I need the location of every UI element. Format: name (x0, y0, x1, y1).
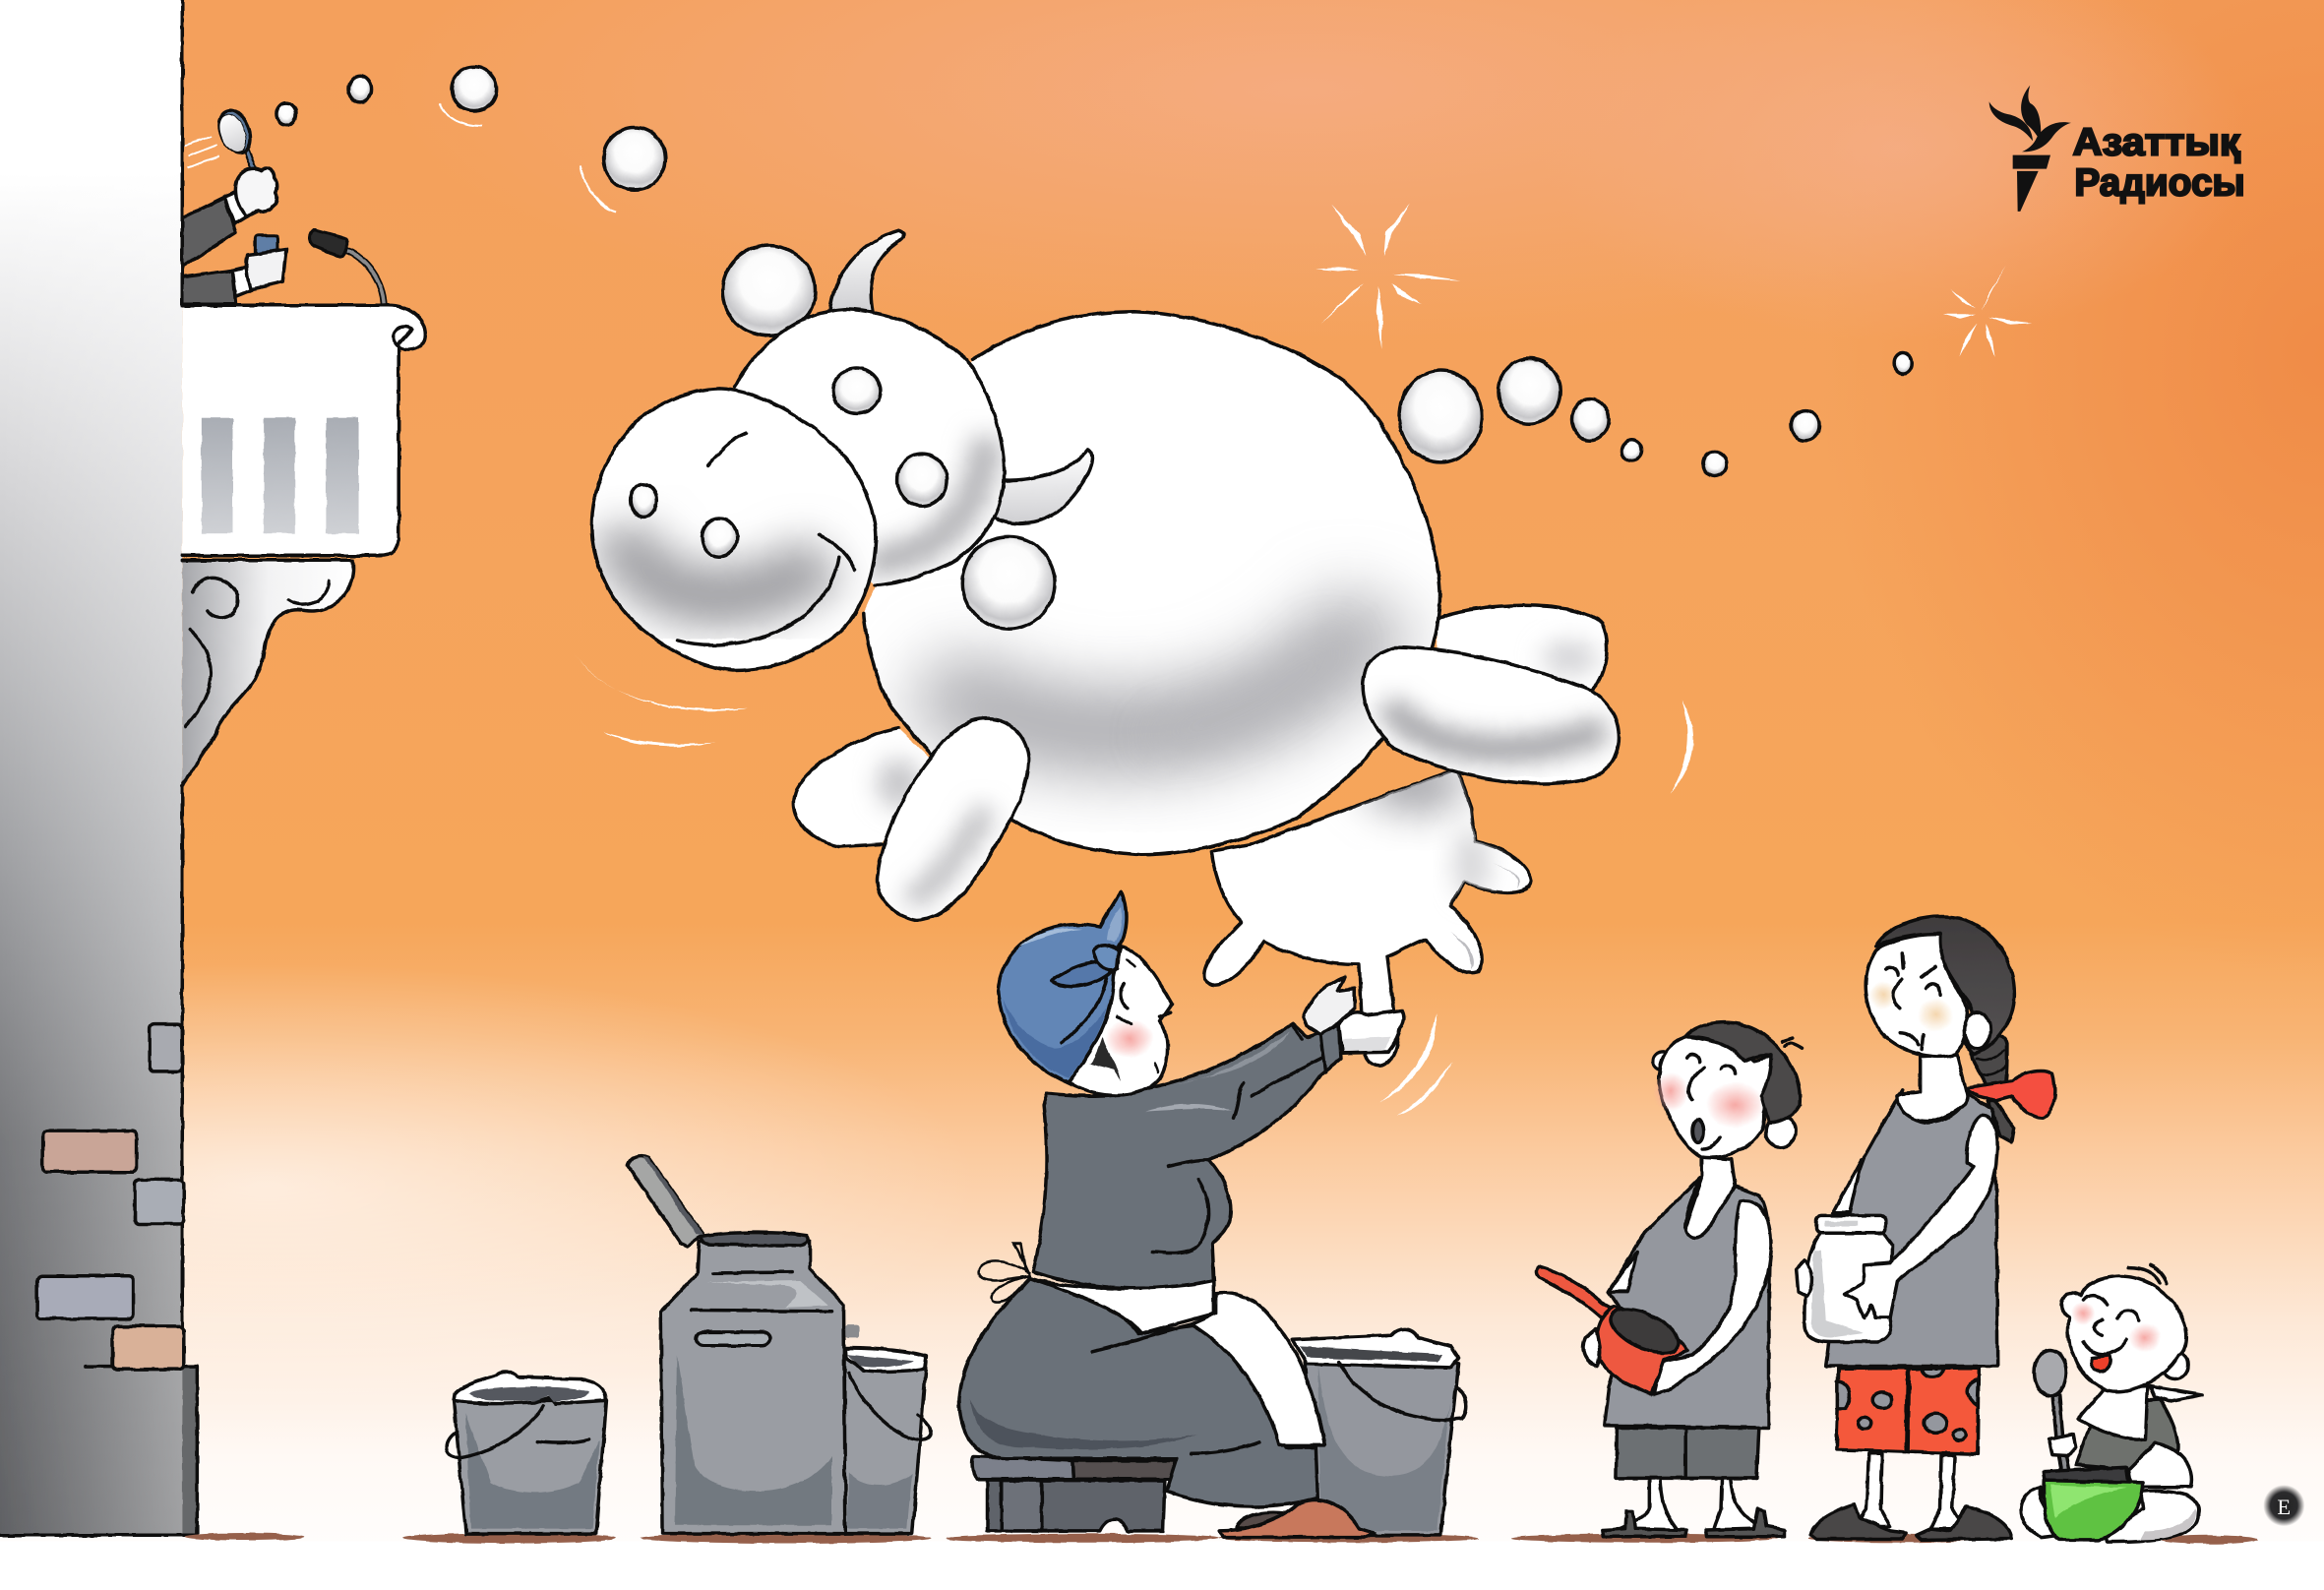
logo text: Азаттық (2073, 120, 2240, 163)
bib (2079, 1386, 2148, 1439)
motion marks (574, 653, 748, 747)
lower ear (962, 536, 1055, 629)
microphone (346, 251, 384, 304)
logo text (2073, 120, 2245, 204)
right horn (989, 450, 1092, 523)
floor shadows (185, 1533, 2257, 1544)
logo: Azattyq Radiosy (1989, 86, 2245, 212)
hands with spoon and bottle, microphone (182, 105, 384, 304)
signature mark: Е (2277, 1495, 2291, 1519)
bucket behind can (844, 1348, 931, 1534)
lower glove (246, 249, 286, 289)
spoon (245, 146, 254, 169)
bottle (255, 235, 277, 258)
sandals (1603, 1511, 1686, 1537)
balcony bracket (182, 560, 353, 785)
right hand gripping teat (1339, 1010, 1404, 1053)
arm and hand (1845, 1116, 1997, 1317)
apron bow (979, 1244, 1029, 1302)
neck (1897, 1055, 1968, 1122)
head (735, 309, 1005, 585)
crossed legs (2021, 1487, 2059, 1538)
bowl (2044, 1467, 2143, 1540)
head (1865, 916, 2014, 1057)
torso and arms (1033, 1023, 1340, 1288)
udder (1204, 754, 1531, 1066)
top ear (722, 245, 816, 336)
milk can (628, 1156, 860, 1534)
tail trail of drops (1399, 352, 1912, 475)
girl with jar (1797, 916, 2054, 1540)
shorts (1616, 1428, 1759, 1478)
shoes (1810, 1504, 1906, 1539)
torch icon (1989, 86, 2071, 212)
motion marks (185, 137, 217, 167)
shirt (2076, 1399, 2177, 1469)
milk can and buckets (447, 1156, 931, 1534)
bucket left (447, 1373, 606, 1534)
vest (1604, 1179, 1769, 1428)
cloth pile and shoe (1219, 1499, 1374, 1538)
left hand on teat (1304, 977, 1355, 1034)
top horn (830, 230, 904, 312)
legs and skirt (959, 1278, 1317, 1506)
balcony (182, 305, 425, 785)
head (1653, 1022, 1802, 1158)
lower sleeve (182, 271, 236, 304)
rear far leg (1437, 605, 1607, 691)
wall with bricks (0, 0, 197, 1535)
legs (1855, 1454, 1890, 1526)
large sparkle (1315, 205, 1461, 349)
milk splash (1379, 1013, 1452, 1116)
muzzle (591, 389, 876, 671)
shorts (1836, 1369, 1979, 1454)
upper sleeve (182, 197, 236, 267)
near front leg (878, 719, 1029, 920)
vest (1826, 1089, 1997, 1367)
face (1069, 947, 1172, 1095)
near rear leg (1363, 647, 1619, 783)
boy with red pot (1536, 1022, 1802, 1537)
jar (1797, 1215, 1893, 1342)
small sparkle (1943, 266, 2032, 357)
motion mark right of cow (1671, 700, 1693, 794)
signature mark (2263, 1485, 2304, 1526)
apron skirt (1192, 1293, 1324, 1445)
milkmaid (959, 891, 1466, 1535)
body (864, 312, 1440, 855)
legs (1616, 1478, 1678, 1531)
headscarf (998, 891, 1127, 1083)
head (2061, 1265, 2188, 1391)
braid and bow (1964, 1035, 2054, 1142)
apron waistband (1029, 1278, 1214, 1333)
arm (2129, 1443, 2191, 1487)
baby with spoon and green bowl (2021, 1265, 2203, 1542)
cuff line (1251, 1059, 1321, 1096)
arm (1654, 1200, 1771, 1395)
front far leg (794, 728, 931, 846)
bucket under apron (1293, 1329, 1466, 1535)
spoon (2034, 1350, 2076, 1474)
neck (1685, 1157, 1736, 1238)
top trail of milk drops (276, 67, 665, 212)
logo text: Радиосы (2074, 160, 2245, 204)
upper glove (236, 168, 277, 216)
stool (972, 1456, 1176, 1531)
cow made of milk (574, 205, 1619, 1066)
pot (1536, 1266, 1687, 1395)
